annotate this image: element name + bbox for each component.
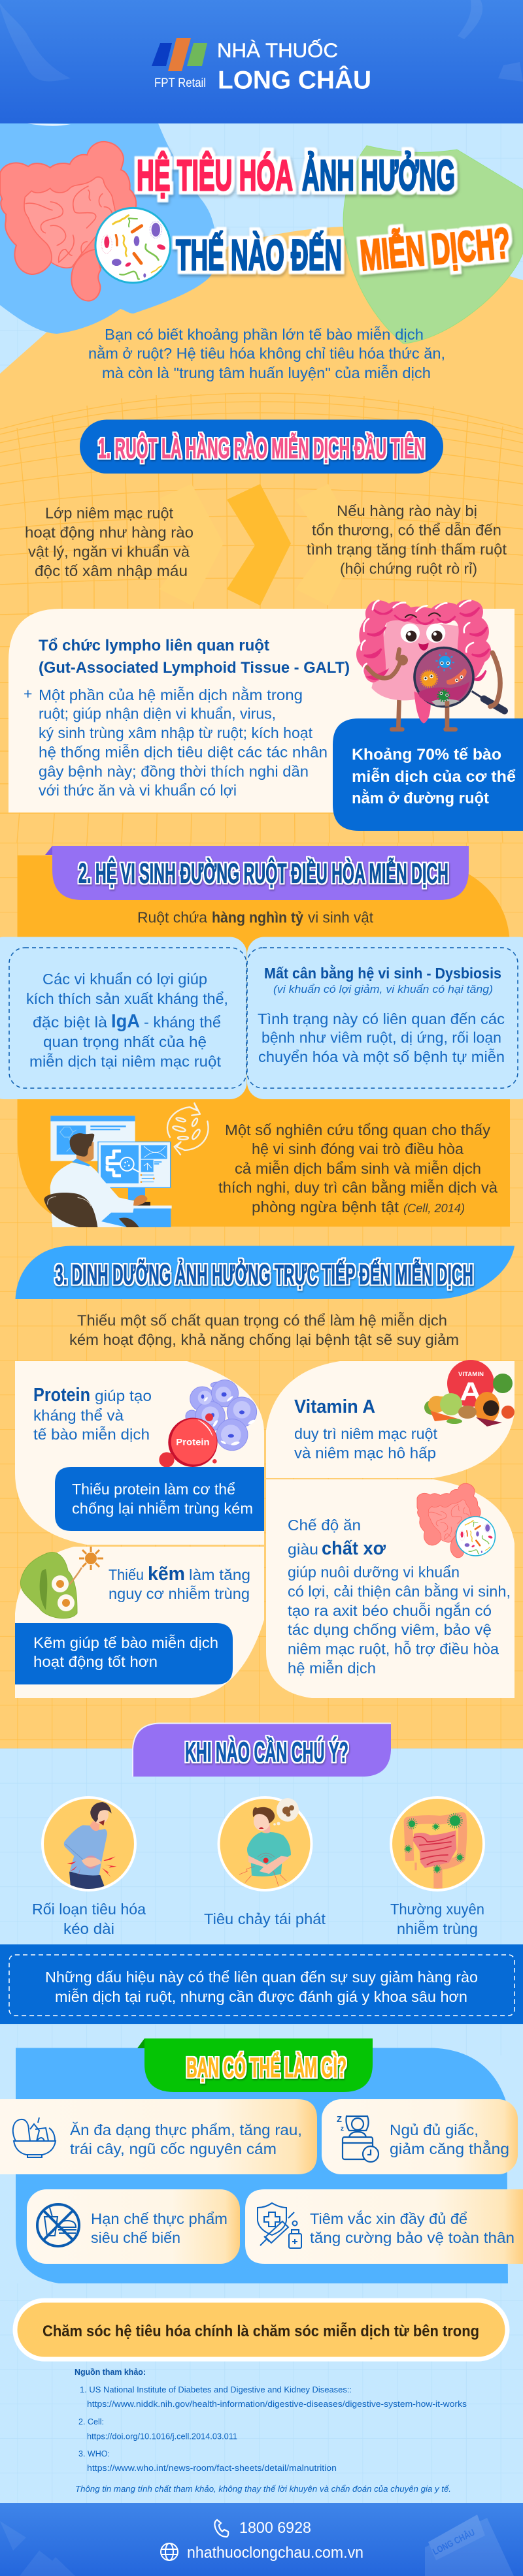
panel: protein: tế bào miễn dịch: [33, 1426, 150, 1443]
intro text: Bạn có biết khoảng phần lớn tế bào miễn dịch: [105, 326, 424, 343]
title: [137, 151, 512, 280]
illustration: small intestine with microbes: [417, 1483, 495, 1558]
references: 1. US National Institute of Diabetes and Digestive and Kidney Diseases::: [80, 2385, 352, 2394]
panel: vitamin A: [266, 1360, 515, 1478]
banner: medical evaluation note: Những dấu hiệu này có thể liên quan đến sự suy giảm hàng rào: [45, 1969, 478, 1986]
panel: beneficial bacteria: miễn dịch tại niêm mạc ruột: [29, 1053, 222, 1070]
illustration: vitamin A foods: VITAMIN: [458, 1371, 484, 1377]
illustration: microbes in circle: [95, 208, 171, 283]
panel: zinc: [15, 1547, 264, 1698]
store illustration: [425, 2515, 514, 2576]
tip: vaccination: Tiêm vắc xin đầy đủ để: [310, 2210, 467, 2227]
panel: dysbiosis: bệnh như viêm ruột, dị ứng, rối loạn: [262, 1029, 501, 1046]
tip: limit ultra-processed food: Hạn chế thực phẩm: [91, 2210, 228, 2227]
text: trillions of microbes: hàng nghìn tỷ: [212, 909, 303, 926]
text: trillions of microbes: Ruột chứa: [137, 909, 207, 926]
panel: fibre: giàu: [288, 1541, 318, 1558]
callout: zinc benefit: [15, 1623, 233, 1684]
panel: beneficial bacteria: quan trọng nhất của hệ: [43, 1033, 207, 1050]
tip: limit ultra-processed food: [27, 2189, 240, 2264]
text: research note: thích nghi, duy trì cân bằng miễn dịch và: [218, 1179, 498, 1196]
references: Thông tin mang tính chất tham khảo, không thay thế lời khuyên và chẩn đoán của chuyên gia y tế.: [75, 2484, 451, 2494]
icon: sleep: [343, 2116, 379, 2162]
references: [75, 2367, 467, 2494]
panel: beneficial bacteria: [0, 937, 247, 1099]
section 3 heading: [16, 1246, 515, 1299]
callout: zinc benefit: Kẽm giúp tế bào miễn dịch: [33, 1634, 218, 1651]
callout: 70 percent: Khoảng 70% tế bào: [352, 746, 501, 764]
warped grid in section 1: [0, 393, 523, 843]
text: research note: cả miễn dịch bẩm sinh và miễn dịch: [235, 1160, 481, 1177]
illustration: zinc cell: [20, 1547, 103, 1618]
panel: GALT: với thức ăn và vi khuẩn có lợi: [39, 782, 237, 799]
text: research note: [218, 1121, 498, 1216]
banner: medical evaluation note: [0, 1944, 523, 2024]
panel: vitamin A: Vitamin A: [294, 1396, 375, 1417]
references: Nguồn tham khảo:: [75, 2367, 146, 2377]
panel: GALT: ruột; giúp nhận diện vi khuẩn, virus,: [39, 705, 276, 722]
text: mucosa barrier: hoạt động như hàng rào: [25, 524, 194, 541]
symptom: recurrent diarrhoea: [218, 1797, 311, 1890]
panel: beneficial bacteria: - kháng thể: [144, 1014, 221, 1031]
panel: zinc: nguy cơ nhiễm trùng: [109, 1585, 250, 1602]
illustration: vitamin A foods: A: [460, 1377, 482, 1406]
text: leaky gut: tình trạng tăng tính thấm ruột: [307, 541, 507, 558]
symptom: prolonged digestive disorder: [42, 1797, 135, 1890]
panel: protein: Protein: [33, 1385, 90, 1406]
panel: protein: kháng thể và: [33, 1407, 124, 1424]
references: https://www.who.int/news-room/fact-sheets/detail/malnutrition: [87, 2463, 337, 2473]
panel: zinc: kẽm: [148, 1564, 185, 1585]
panel: fibre: [266, 1479, 515, 1698]
tip: sleep: [322, 2099, 518, 2174]
intro text: [88, 326, 445, 381]
tip: vaccination: tăng cường bảo vệ toàn thân: [310, 2229, 515, 2246]
symptom labels: [32, 1901, 484, 1937]
panel: dysbiosis: chuyển hóa và một số bệnh tự miễn: [258, 1048, 505, 1065]
illustration: gut character with magnifier: [356, 600, 505, 730]
panel: fibre: giúp nuôi dưỡng vi khuẩn: [288, 1564, 460, 1581]
text: leaky gut: (hội chứng ruột rò rỉ): [340, 560, 477, 577]
symptom labels: nhiễm trùng: [397, 1920, 478, 1937]
text: leaky gut: tổn thương, có thể dẫn đến: [312, 521, 501, 538]
text: research note: Một số nghiên cứu tổng quan cho thấy: [225, 1121, 491, 1138]
icon: globe: [161, 2543, 178, 2560]
callout: zinc benefit: hoạt động tốt hơn: [33, 1653, 158, 1670]
footer: [0, 2503, 523, 2576]
text: trillions of microbes: vi sinh vật: [308, 909, 374, 926]
panel: beneficial bacteria: Các vi khuẩn có lợi giúp: [42, 971, 207, 988]
tip: varied diet: [0, 2099, 317, 2174]
text: mucosa barrier: Lớp niêm mạc ruột: [45, 504, 174, 521]
panel: vitamin A: và niêm mạc hô hấp: [294, 1445, 436, 1462]
logo: Nhà thuốc Long Châu: LONG CHÂU: [218, 65, 371, 94]
panel: fibre: tác dụng chống viêm, bảo vệ: [288, 1621, 492, 1638]
icon: phone: [214, 2520, 228, 2537]
tip: varied diet: Ăn đa dạng thực phẩm, tăng rau,: [70, 2121, 302, 2138]
panel: dysbiosis: Tình trạng này có liên quan đến các: [258, 1010, 505, 1027]
callout: protein deficiency: [55, 1467, 264, 1531]
panel: beneficial bacteria: đặc biệt là: [33, 1014, 107, 1031]
panel: dysbiosis: [247, 937, 523, 1099]
symptom labels: Tiêu chảy tái phát: [204, 1910, 326, 1927]
panel: GALT: (Gut-Associated Lymphoid Tissue - GALT): [39, 659, 350, 677]
title: HỆ TIÊU HÓA: [137, 151, 293, 199]
tip: sleep: Ngủ đủ giấc,: [390, 2121, 479, 2138]
text: research note: hệ vi sinh đóng vai trò điều hòa: [252, 1140, 464, 1157]
section 2 heading: [45, 846, 469, 900]
store illustration: LONG CHÂU: [431, 2526, 477, 2557]
tip: sleep: Z: [337, 2114, 342, 2124]
text: nutrient deficiency: [69, 1312, 459, 1348]
chevron arrows: [160, 484, 360, 605]
phone number: 1800 6928: [239, 2519, 311, 2537]
logo: Nhà thuốc Long Châu: NHÀ THUỐC: [217, 38, 338, 61]
symptom labels: Rối loạn tiêu hóa: [32, 1901, 146, 1918]
text: mucosa barrier: độc tố xâm nhập máu: [35, 562, 188, 579]
panel: fibre: tạo ra axit béo chuỗi ngắn có: [288, 1602, 492, 1619]
illustration: vitamin A foods: [424, 1360, 515, 1426]
callout: 70 percent: miễn dịch của cơ thể: [352, 767, 516, 786]
section 2 panel: [17, 856, 510, 1227]
logo: Nhà thuốc Long Châu: [217, 38, 371, 94]
panel: vitamin A: duy trì niêm mạc ruột: [294, 1425, 438, 1442]
intro text: nằm ở ruột? Hệ tiêu hóa không chỉ tiêu hóa thức ăn,: [88, 345, 445, 362]
callout: protein deficiency: Thiếu protein làm cơ thể: [72, 1481, 235, 1498]
website: nhathuoclongchau.com.vn: [187, 2544, 363, 2562]
text: leaky gut: [307, 502, 507, 577]
references: 3. WHO:: [78, 2449, 110, 2458]
panel: dysbiosis: (vi khuẩn có lợi giảm, vi khuẩn có hại tăng): [273, 983, 493, 995]
illustration: intestine: [0, 142, 136, 301]
panel: GALT: hệ thống miễn dịch tiêu diệt các tác nhân: [39, 743, 328, 760]
illustration: scientist at monitors: [44, 1116, 172, 1227]
header band: [0, 0, 523, 123]
text: trillions of microbes: [137, 909, 374, 926]
text: research note: phòng ngừa bệnh tật: [252, 1199, 399, 1216]
icon: salad bowl: [13, 2117, 56, 2157]
panel: GALT: gây bệnh này; đồng thời thích nghi dần: [39, 763, 309, 780]
text: mucosa barrier: [25, 504, 194, 579]
tip: sleep: giảm căng thẳng: [390, 2139, 509, 2157]
panel: GALT: [8, 609, 515, 813]
panel: fibre: niêm mạc ruột, hỗ trợ điều hòa: [288, 1641, 499, 1658]
heading: when to watch out: KHI NÀO CẦN CHÚ Ý?: [185, 1736, 348, 1768]
panel: GALT: ký sinh trùng xâm nhập từ ruột; kích hoạt: [39, 724, 313, 741]
panel: what you can do: [16, 2048, 508, 2283]
panel: zinc: làm tăng: [189, 1566, 250, 1583]
logo: FPT Retail mark: [152, 38, 207, 90]
takeaway pill: [15, 2300, 507, 2359]
icon: vaccine shield and syringe: [258, 2203, 301, 2248]
panel: GALT: +: [24, 685, 32, 702]
logo: FPT Retail mark: FPT Retail: [154, 76, 206, 90]
text: leaky gut: Nếu hàng rào này bị: [337, 502, 477, 519]
heading: what you can do: BẠN CÓ THỂ LÀM GÌ?: [186, 2052, 346, 2084]
references: https://doi.org/10.1016/j.cell.2014.03.011: [87, 2431, 237, 2441]
text: nutrient deficiency: Thiếu một số chất quan trọng có thể làm hệ miễn dịch: [77, 1312, 447, 1328]
symptom labels: kéo dài: [63, 1920, 114, 1937]
callout: 70 percent: nằm ở đường ruột: [352, 789, 489, 807]
text: nutrient deficiency: kém hoạt động, khả năng chống lại bệnh tật sẽ suy giảm: [69, 1331, 459, 1348]
symptom labels: Thường xuyên: [390, 1901, 484, 1918]
heading: what you can do: [137, 2038, 373, 2092]
banner: medical evaluation note: miễn dịch tại ruột, nhưng cần được đánh giá y khoa sâu hơn: [55, 1988, 467, 2005]
callout: 70 percent: [333, 718, 523, 831]
panel: GALT: Tổ chức lympho liên quan ruột: [39, 637, 269, 654]
icon: no fast food: [37, 2204, 79, 2246]
symptom: frequent infection: [391, 1797, 484, 1890]
references: 2. Cell:: [78, 2417, 104, 2426]
panel: beneficial bacteria: IgA: [111, 1011, 140, 1032]
title: THẾ NÀO ĐẾN: [176, 231, 342, 279]
heading: when to watch out: [133, 1723, 391, 1777]
tip: varied diet: trái cây, ngũ cốc nguyên cám: [70, 2140, 277, 2157]
panel: fibre: hệ miễn dịch: [288, 1660, 376, 1677]
tip: vaccination: [245, 2189, 523, 2264]
callout: protein deficiency: chống lại nhiễm trùng kém: [72, 1500, 253, 1517]
panel: GALT: Một phần của hệ miễn dịch nằm trong: [39, 686, 303, 703]
panel: protein: giúp tạo: [95, 1387, 152, 1404]
panel: dysbiosis: Mất cân bằng hệ vi sinh - Dysbiosis: [264, 964, 501, 982]
references: https://www.niddk.nih.gov/health-information/digestive-diseases/digestive-system-how-it-works: [87, 2399, 467, 2409]
tip: sleep: z: [341, 2125, 344, 2133]
illustration: protein and cells: [159, 1380, 257, 1468]
panel: protein: [15, 1361, 264, 1545]
panel: fibre: chất xơ: [322, 1538, 386, 1559]
takeaway pill: Chăm sóc hệ tiêu hóa chính là chăm sóc miễn dịch từ bên trong: [42, 2322, 479, 2340]
icon: microbiome cycle: [167, 1103, 209, 1155]
tip: limit ultra-processed food: siêu chế biến: [91, 2229, 180, 2246]
panel: fibre: Chế độ ăn: [288, 1517, 361, 1534]
text: research note: (Cell, 2014): [403, 1202, 465, 1215]
section 1 heading: [80, 419, 443, 474]
illustration: protein and cells: Protein: [176, 1437, 210, 1447]
panel: zinc: Thiếu: [109, 1566, 144, 1583]
text: mucosa barrier: vật lý, ngăn vi khuẩn và: [28, 543, 190, 560]
panel: fibre: có lợi, cải thiện cân bằng vi sinh,: [288, 1583, 511, 1600]
intro text: mà còn là "trung tâm huấn luyện" của miễn dịch: [102, 364, 431, 381]
panel: beneficial bacteria: kích thích sản xuất kháng thể,: [26, 990, 228, 1007]
